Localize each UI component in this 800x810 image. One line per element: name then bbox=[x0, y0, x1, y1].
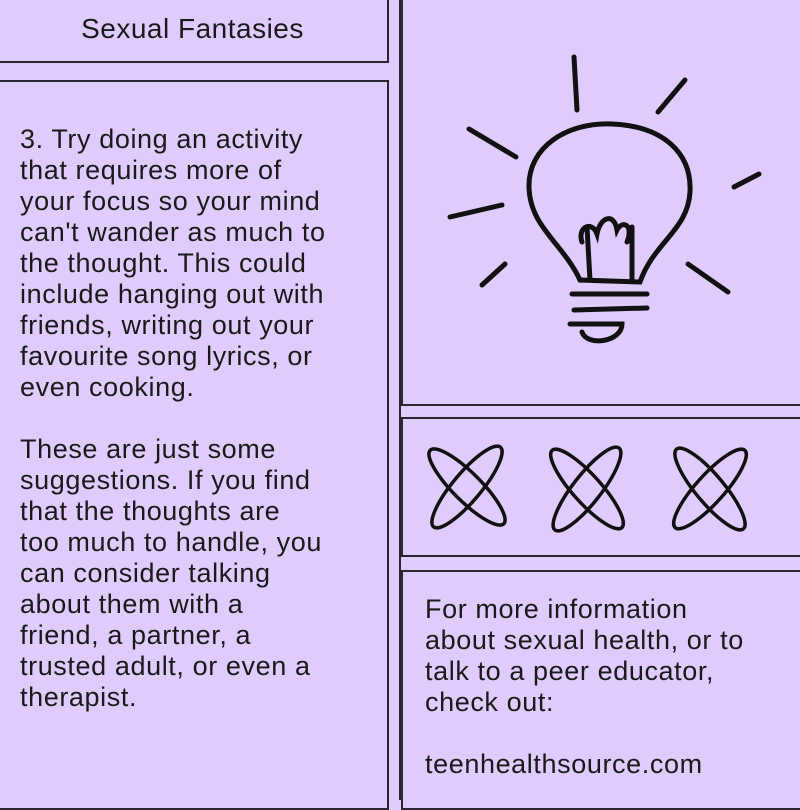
text block: tip 3: can consider talking bbox=[20, 558, 271, 588]
text block: info: For more information bbox=[425, 594, 688, 624]
text block: info bbox=[425, 594, 744, 779]
text block: tip 3: can't wander as much to bbox=[20, 217, 326, 247]
text block: tip 3: your focus so your mind bbox=[20, 186, 320, 216]
text block: info: check out: bbox=[425, 687, 554, 717]
text block: tip 3: 3. Try doing an activity bbox=[20, 124, 303, 154]
text block: tip 3: even cooking. bbox=[20, 372, 194, 402]
panel: main text bbox=[0, 80, 389, 810]
text block: tip 3: that requires more of bbox=[20, 155, 282, 185]
text block: info: teenhealthsource.com bbox=[425, 749, 703, 779]
text block: tip 3: about them with a bbox=[20, 589, 243, 619]
icon: xxx bbox=[427, 444, 748, 533]
panel: title bbox=[0, 0, 389, 63]
text block: tip 3 bbox=[20, 124, 326, 712]
text block: tip 3: suggestions. If you find bbox=[20, 465, 311, 495]
text block: tip 3: trusted adult, or even a bbox=[20, 651, 311, 681]
text block: tip 3: favourite song lyrics, or bbox=[20, 341, 313, 371]
panel: lightbulb bbox=[401, 0, 800, 406]
text block: info: talk to a peer educator, bbox=[425, 656, 714, 686]
title: Sexual Fantasies bbox=[81, 13, 304, 44]
text block: tip 3: the thought. This could bbox=[20, 248, 306, 278]
panel: kisses bbox=[401, 417, 800, 557]
icon: lightbulb bbox=[448, 54, 762, 344]
text block: tip 3: too much to handle, you bbox=[20, 527, 322, 557]
text block: tip 3: that the thoughts are bbox=[20, 496, 280, 526]
text block: tip 3: These are just some bbox=[20, 434, 276, 464]
text block: tip 3: friends, writing out your bbox=[20, 310, 314, 340]
divider line bbox=[399, 0, 401, 800]
text block: tip 3: therapist. bbox=[20, 682, 137, 712]
text block: tip 3: friend, a partner, a bbox=[20, 620, 251, 650]
text block: tip 3: include hanging out with bbox=[20, 279, 324, 309]
panel: more info bbox=[401, 570, 800, 810]
text block: info: about sexual health, or to bbox=[425, 625, 744, 655]
